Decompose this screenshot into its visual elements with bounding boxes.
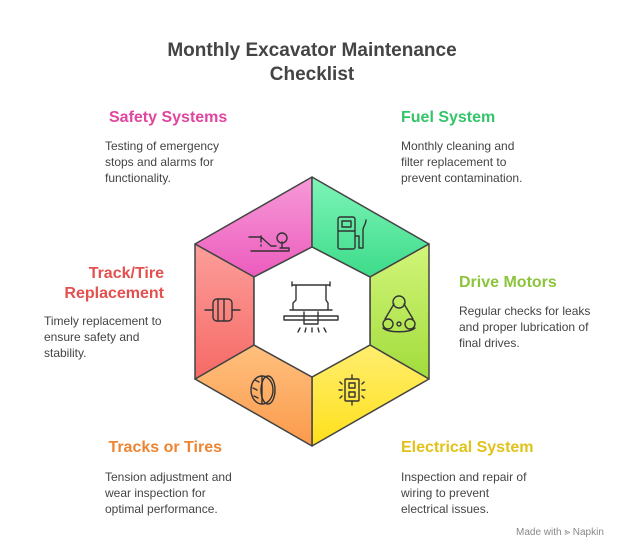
text: electrical: Inspection and repair of wiring to prevent electrical issues. — [401, 470, 526, 516]
heading: track/tire: Replacement — [64, 285, 164, 302]
text: track/tire: Timely replacement to ensure safety and stability. — [44, 314, 162, 360]
segment: safety — [195, 177, 312, 277]
segment: electrical — [312, 345, 429, 446]
heading: tracks or tires: Tracks or Tires — [108, 439, 222, 456]
icon: safety — [249, 233, 289, 251]
text: drive: Regular checks for leaks and proper lubrication of final drives. — [459, 304, 590, 350]
segment: track/tire — [195, 244, 254, 379]
icon: electrical — [339, 375, 365, 405]
segment: drive — [370, 244, 429, 379]
segment: fuel — [312, 177, 429, 277]
heading: electrical: Electrical System — [401, 439, 534, 456]
icon: fuel — [338, 217, 366, 249]
footer: Made with ⪢ Napkin — [516, 527, 604, 538]
text: safety: Testing of emergency stops and alarms for functionality. — [105, 139, 219, 185]
center — [254, 247, 370, 377]
title — [167, 40, 457, 85]
heading: track/tire — [64, 265, 164, 302]
text: fuel: Monthly cleaning and filter replacement to prevent contamination. — [401, 139, 522, 185]
icon: drive — [383, 296, 415, 332]
icon: excavator center — [284, 282, 338, 332]
icon: tire — [251, 376, 275, 404]
text: tracks: Tension adjustment and wear inspection for optimal performance. — [105, 470, 232, 516]
segment: tracks — [195, 345, 312, 446]
icon: track/tire — [205, 299, 240, 321]
title: Monthly Excavator Maintenance — [167, 40, 457, 61]
heading: fuel system: Fuel System — [401, 109, 495, 126]
heading: safety systems: Safety Systems — [109, 109, 227, 126]
heading: drive motors: Drive Motors — [459, 274, 557, 291]
title: Checklist — [270, 64, 354, 85]
heading: track/tire: Track/Tire — [89, 265, 164, 282]
